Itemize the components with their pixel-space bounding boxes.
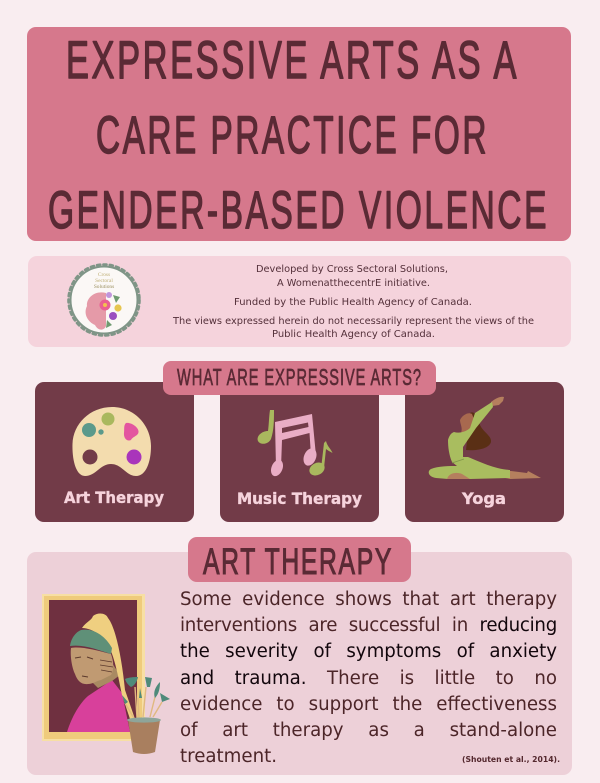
credits text: A WomenatthecentrE initiative.: [277, 278, 430, 289]
text block: art therapy evidence: [180, 589, 557, 767]
label: music therapy: Music Therapy: [237, 489, 363, 508]
text block: art therapy evidence: Some evidence shows that art therapy: [180, 589, 557, 610]
icon: logo: Cross: [98, 272, 110, 278]
icon: music notes: [258, 410, 332, 478]
heading: art therapy: [188, 537, 411, 582]
text block: art therapy evidence: the severity of symptoms of anxiety: [180, 641, 557, 662]
icon: logo: [68, 264, 140, 336]
label: art therapy: Art Therapy: [64, 488, 165, 507]
illustration: potted plant: [122, 677, 170, 754]
heading: art therapy: ART THERAPY: [203, 541, 393, 582]
citation: (Shouten et al., 2014).: [462, 755, 560, 764]
text block: art therapy evidence: evidence to support the effectiveness: [180, 694, 557, 715]
label: yoga: Yoga: [461, 489, 506, 508]
text block: art therapy evidence: treatment.: [180, 746, 277, 767]
text block: art therapy evidence: of art therapy as a stand-alone: [180, 720, 557, 741]
icon: logo: Sectoral: [95, 278, 113, 284]
panel: credits: [28, 256, 571, 347]
card: music therapy: [220, 382, 379, 522]
card: yoga: [405, 382, 564, 522]
illustration: portrait painting: [42, 594, 145, 741]
card: art therapy: [35, 382, 194, 522]
icon: logo: Solutions: [94, 284, 114, 290]
heading: what are expressive arts: WHAT ARE EXPRESSIVE ARTS?: [177, 364, 422, 390]
panel: art therapy: [27, 552, 572, 775]
heading: what are expressive arts: [163, 361, 436, 395]
icon: yoga figure: [429, 397, 541, 479]
credits text: [172, 264, 534, 340]
icon: palette: [72, 407, 151, 476]
credits text: Developed by Cross Sectoral Solutions,: [256, 264, 448, 275]
credits text: The views expressed herein do not necessarily represent the views of the: [172, 316, 534, 327]
credits text: Public Health Agency of Canada.: [272, 329, 435, 340]
text block: art therapy evidence: interventions are successful in reducing: [180, 615, 557, 636]
credits text: Funded by the Public Health Agency of Canada.: [234, 297, 472, 308]
title panel: [27, 27, 571, 241]
title: [48, 31, 549, 240]
text block: art therapy evidence: and trauma. There is little to no: [180, 668, 557, 689]
